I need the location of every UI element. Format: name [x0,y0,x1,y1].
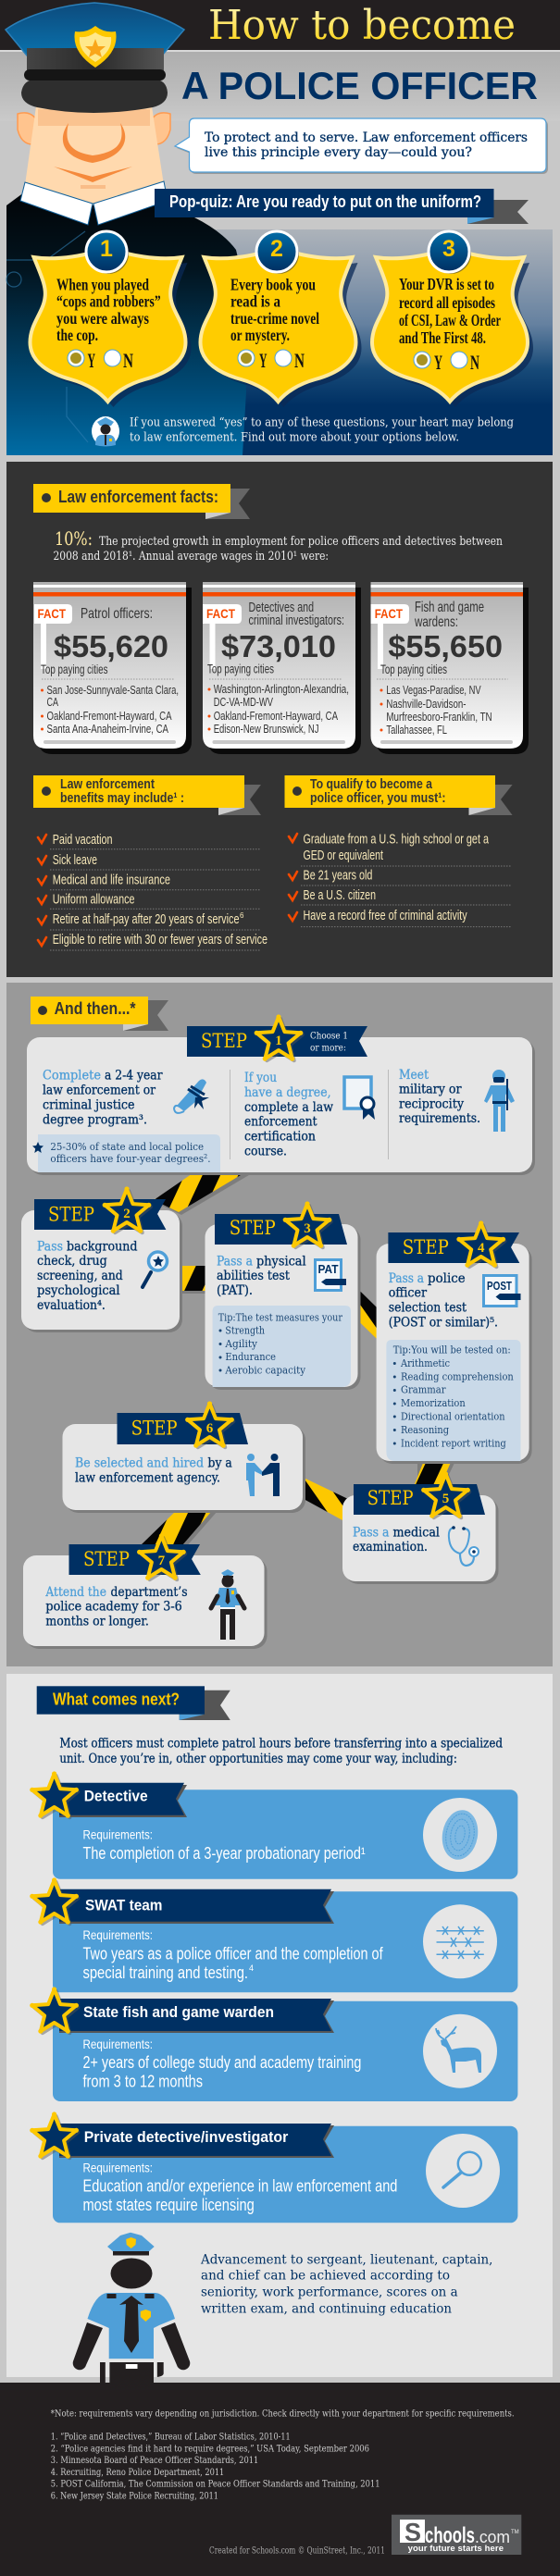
step 1 option: degree program: criminal justice [43,1097,135,1112]
text: projected growth [54,527,504,564]
step 7 card: STEP [83,1548,130,1570]
quiz badge 2: read is a [230,292,280,311]
step 6 card: STEP [131,1418,178,1440]
tip box: PAT [213,1306,351,1387]
icon: magnifier with star [143,1252,167,1287]
illustration: large officer [73,2233,190,2383]
step 1 card [27,1014,535,1175]
fact card: fish and game wardens: Top paying cities [380,662,447,676]
fact card: patrol officers [33,582,192,754]
tip box: POST: Memorization [401,1396,466,1409]
text: projected growth: 2008 and 2018¹. Annual average wages in 2010¹ were: [54,550,329,564]
icon: magnifying glass [443,2152,481,2187]
text: next intro: Most officers must complete patrol hours before transferring into a specialized [59,1736,503,1751]
tip box: POST: Arithmetic [400,1356,450,1369]
career card: detective: The completion of a 3-year probationary period¹ [83,1844,366,1863]
fact card: fish and game wardens: Fish and game [415,600,484,615]
quiz badge 1: Y [87,349,95,372]
icon: POST test sheet: POST [487,1279,512,1293]
step 3 card: Pass a [217,1255,253,1269]
fact card: patrol officers: $55,620 [54,629,168,663]
fact card: fish and game wardens: wardens: [414,614,458,630]
career card: SWAT team [30,1877,517,1992]
step 1 option: certification: enforcement [244,1115,317,1130]
step 1 option: certification: have a degree, [244,1085,331,1100]
step 7 card: police academy for 3-6 [45,1600,182,1615]
icon: certificate [344,1077,375,1120]
text: sources [51,2432,380,2501]
step 1 ribbon [187,1014,367,1061]
tip box: PAT: Tip:The test measures your [218,1310,342,1323]
step 1 option: degree program: degree program³. [43,1112,147,1127]
speech bubble intro: live this principle every day—could you? [205,145,472,160]
panel: and then steps [6,983,553,1666]
step 6 card: Be selected and hired [75,1456,204,1471]
list: qualifications: Graduate from a U.S. high school or get a [304,832,489,848]
step 2 card: STEP [48,1203,94,1225]
step 4 card: selection test [389,1300,467,1315]
heading: qualifications: police officer, you must¹: [310,790,446,806]
icon: diploma [174,1079,209,1113]
text: sources: 1. “Police and Detectives,” Bureau of Labor Statistics, 2010-11 [51,2432,291,2443]
fact card: patrol officers: CA [46,695,58,709]
quiz badge 3: Your DVR is set to [399,275,494,293]
quiz badge 2: 2 [270,236,283,262]
speech bubble intro [175,118,548,174]
step 2 card: psychological [37,1283,120,1298]
quiz badge 3: and The First 48. [399,328,486,347]
step 1 option: certification: certification [244,1130,316,1145]
text: projected growth: 10%: [55,527,93,550]
tip box: POST: Grammar [401,1383,446,1396]
career card: SWAT team: 4 [249,1963,254,1973]
step 5 card: medical [392,1526,440,1541]
step 4 card: STEP [403,1236,449,1258]
panel: law enforcement facts [6,462,553,977]
logo: Schools.com: .com [475,2528,510,2546]
quiz badge 2: or mystery. [230,326,290,344]
step 6 card: 6 [206,1421,214,1436]
text: sources: 6. New Jersey State Police Recruiting, 2011 [51,2490,218,2501]
step 1 ribbon: or more: [310,1043,346,1054]
fact card: fish and game wardens: $55,650 [388,629,503,663]
panel: pop quiz background [6,229,553,455]
step 3 card [205,1201,361,1390]
list: qualifications: Be a U.S. citizen [304,887,376,903]
quiz badge 1: When you played [56,276,149,294]
list: benefits: Retire at half-pay after 20 years of service [53,911,240,927]
fact card: fish and game wardens: FACT [375,606,403,621]
quiz badge 2: true-crime novel [230,309,319,328]
list: benefits: Eligible to retire with 30 or fewer years of service [53,932,268,947]
step 5 card: examination. [353,1540,428,1554]
career card: private detective [30,2112,517,2223]
fact card: fish and game wardens: Tallahassee, FL [386,723,447,737]
step 1 option: certification: If you [244,1071,277,1085]
step 1 option: military: military or [399,1083,462,1097]
tip box: POST: Incident report writing [401,1436,506,1449]
step 6 card: by a [207,1456,232,1471]
quiz badge 2: Every book you [230,276,316,294]
step 1 option: certification [230,1070,375,1159]
icon: handshake [246,1454,280,1496]
tip box: POST [386,1340,520,1461]
text: yes answer conclusion: If you answered “yes” to any of these questions, your heart may belong [130,416,514,430]
step 7 card: months or longer. [45,1615,149,1629]
panel: what comes next [6,1674,553,2377]
banner: pop quiz: Pop-quiz: Are you ready to put on the uniform? [169,192,481,211]
text: next intro: unit. Once you’re in, other opportunities may come your way, including: [59,1752,457,1766]
heading: what comes next [37,1686,230,1720]
heading: and then: And then...* [55,999,136,1018]
fact card: patrol officers: Santa Ana-Anaheim-Irvine, CA [46,722,168,736]
step 2 card: check, drug [37,1254,107,1269]
step 1 option: certification: complete a law [244,1100,333,1115]
step 1 option: degree program: law enforcement or [43,1083,156,1097]
fact card: patrol officers: San Jose-Sunnyvale-Santa Clara, [46,683,179,697]
step 2 card: background [67,1240,138,1255]
step 5 card: Pass a [353,1526,389,1541]
step 7 card: 7 [158,1554,166,1568]
caution tape connectors [141,1170,455,1548]
step 1 option: military: requirements. [399,1111,480,1126]
career card: detective: Requirements: [83,1827,153,1842]
logo: Schools.com: TM [511,2530,519,2535]
quiz badge 3: of CSI, Law & Order [399,311,501,329]
step 7 card [23,1533,267,1649]
fact card: detectives: Edison-New Brunswick, NJ [214,722,318,736]
step 2 card: 2 [123,1207,131,1221]
step 6 card: law enforcement agency. [75,1471,220,1486]
career card: private detective: Private detective/investigator [84,2128,289,2146]
tip box: PAT: Agility [224,1337,257,1350]
list: benefits: 6 [240,911,244,920]
fact card: detectives: Oakland-Fremont-Hayward, CA [214,709,338,723]
title: How to become: How to become [208,2,516,49]
icon: small officer [92,416,119,446]
speech bubble intro: To protect and to serve. Law enforcement officers [205,130,528,145]
career card: state fish and game warden [30,1987,517,2101]
step 1 option: military [388,1068,515,1159]
career card: detective: Detective [84,1788,148,1805]
title: A police officer: A POLICE OFFICER [181,64,538,107]
step 7 card: Attend the [44,1585,106,1600]
heading: qualifications [285,775,513,815]
text: advancement: seniority, work performance, scores on a [201,2285,458,2300]
career card: private detective: Education and/or experience in law enforcement and [83,2176,397,2195]
step 4 card: 4 [478,1241,485,1256]
step 1 option: degree program: a 2-4 year [105,1069,163,1084]
text: advancement: and chief can be achieved according to [201,2268,450,2283]
step 5 card: STEP [367,1487,414,1509]
step 5 card: 5 [442,1492,449,1506]
tip box: POST: Directional orientation [401,1409,505,1422]
quiz badge 1: you were always [56,309,149,328]
step 1 option: certification: course. [244,1145,287,1159]
career card: state fish and game warden: State fish and game warden [83,2003,274,2021]
fact card: patrol officers: Patrol officers: [81,606,153,622]
list: qualifications: Have a record free of criminal activity [304,908,467,923]
fact card: fish and game wardens: Nashville-Davidson- [386,697,467,711]
fact card: detectives: FACT [206,606,235,621]
icon: PAT test sheet [315,1260,346,1290]
step 2 card: evaluation⁴. [37,1298,106,1313]
quiz badge 1: “cops and robbers” [56,292,161,311]
career card: private detective: Requirements: [83,2160,153,2174]
fact card: patrol officers: FACT [37,606,66,621]
text: advancement [200,2253,492,2316]
icon: stethoscope [449,1526,479,1566]
step 1 ribbon: STEP [201,1030,247,1052]
logo: Schools.com: chools [425,2523,475,2548]
quiz badge 3: 3 [442,236,455,262]
step 1 option: degree program: 25-30% of state and local police [50,1140,204,1153]
fact card: fish and game wardens [370,582,529,754]
logo: Schools.com: your future starts here [408,2544,504,2554]
step 4 card: Pass a [389,1271,424,1286]
step 3 card: abilities test [217,1269,291,1283]
list: benefits: Uniform allowance [53,892,135,908]
quiz badge 3: Y [434,351,442,374]
step 3 card: physical [256,1255,306,1269]
list: qualifications: Be 21 years old [304,868,372,884]
fact card: detectives: $73,010 [221,629,336,663]
text: next intro [59,1736,503,1766]
text: sources: 5. POST California, The Commission on Peace Officer Standards and Training, 2011 [51,2479,380,2490]
quiz badge 3: N [470,351,479,374]
icon: soldier [484,1070,515,1132]
list: qualifications: GED or equivalent [304,848,384,863]
icon: fingerprint [439,1807,481,1863]
step 4 card: police [428,1271,466,1286]
tip box: POST: Tip:You will be tested on: [393,1343,511,1356]
quiz badge 1: N [123,349,133,372]
text: yes answer conclusion [130,416,514,445]
heading: law enforcement facts [33,484,250,519]
icon: deer [436,2026,481,2073]
quiz badge 3: record all episodes [399,293,495,312]
career card: SWAT team: Two years as a police officer and the completion of [83,1944,383,1963]
icon: POST test sheet [483,1275,520,1307]
quiz badge 1: 1 [100,236,113,262]
list: benefits: Paid vacation [53,832,113,848]
tip box: POST: Reading comprehension [401,1369,514,1382]
text: sources: 2. “Police agencies find it hard to require degrees,” USA Today, September 2006 [51,2443,369,2454]
step 1 ribbon: Choose 1 [310,1031,348,1042]
career card: state fish and game warden: Requirements: [83,2037,153,2051]
quiz badge 2: N [294,349,305,372]
step 1 option: military: Meet [399,1068,429,1083]
step 5 card [342,1471,498,1584]
step 4 card [377,1220,532,1464]
quiz badge 1 [30,231,191,407]
career card: state fish and game warden: from 3 to 12 months [83,2073,203,2091]
step 1 ribbon: 1 [275,1034,282,1048]
heading: benefits [33,775,261,815]
heading: what comes next: What comes next? [53,1690,180,1708]
step 1 option: military: reciprocity [399,1097,464,1112]
step 3 card: 3 [304,1221,311,1236]
step 1 option: degree program [32,1069,220,1172]
text: sources: 3. Minnesota Board of Peace Officer Standards, 2011 [51,2455,258,2466]
illustration: police officer [6,3,246,455]
career card: SWAT team: special training and testing. [83,1963,248,1982]
fact card: detectives: Top paying cities [207,662,274,676]
step 1 option: degree program: officers have four-year degrees². [50,1152,211,1165]
icon: barbed wire [437,1926,484,1959]
tip box: PAT: Strength [225,1324,265,1337]
quiz badge 2 [200,231,361,407]
fact card: fish and game wardens: Las Vegas-Paradise, NV [386,683,481,697]
heading: and then [31,997,168,1031]
list: qualifications [289,832,511,927]
icon: PAT test sheet: PAT [318,1262,339,1276]
career card: SWAT team: SWAT team [85,1896,163,1913]
logo: Schools.com: S [404,2518,421,2546]
step 4 card: officer [389,1286,428,1301]
quiz badge 1: the cop. [56,326,98,344]
text: advancement: Advancement to sergeant, lieutenant, captain, [200,2253,492,2268]
fact card: fish and game wardens: Murfreesboro-Franklin, TN [386,710,492,724]
heading: benefits: benefits may include¹ : [60,790,184,806]
fact card: patrol officers: Top paying cities [41,662,107,676]
fact card: detectives [203,582,361,754]
step 2 card [21,1186,182,1332]
list: benefits: Sick leave [53,852,97,868]
fact card: detectives: Detectives and [248,600,314,615]
career card: state fish and game warden: 2+ years of college study and academy training [83,2053,361,2072]
tip box: PAT: Aerobic capacity [225,1364,305,1377]
step 3 card: STEP [230,1217,276,1239]
logo: Schools.com [392,2515,521,2555]
heading: qualifications: To qualify to become a [310,776,433,792]
heading: benefits: Law enforcement [60,776,155,792]
step 4 card: (POST or similar)⁵. [389,1315,498,1330]
title band [0,0,560,52]
fact card: patrol officers: Oakland-Fremont-Hayward, CA [46,709,172,723]
step 3 card: (PAT). [217,1283,253,1298]
list: benefits: Medical and life insurance [53,873,170,888]
tip box: POST: Reasoning [401,1423,450,1436]
step 2 card: screening, and [37,1269,123,1283]
step 2 card: Pass [37,1240,63,1255]
career card: detective [30,1771,517,1879]
text: sources: 4. Recruiting, Reno Police Department, 2011 [51,2467,224,2478]
career card: SWAT team: Requirements: [83,1927,153,1942]
step 6 card [63,1401,305,1513]
fact card: detectives: Washington-Arlington-Alexandria, [214,682,349,696]
step 1 option: degree program: Complete [43,1069,101,1084]
career card: private detective: most states require licensing [83,2196,255,2214]
fact card: detectives: DC-VA-MD-WV [214,695,273,709]
list: benefits [38,832,268,950]
footer [0,2383,560,2576]
heading: law enforcement facts: Law enforcement facts: [58,488,218,506]
step 7 card: department’s [111,1585,188,1600]
text: yes answer conclusion: to law enforcement. Find out more about your options below. [130,431,459,445]
quiz badge 2: Y [259,349,268,372]
text: credit: Created for Schools.com © QuinStreet, Inc., 2011 [209,2545,385,2556]
quiz badge 3 [372,231,533,407]
icon: academy officer [211,1569,244,1640]
tip box: PAT: Endurance [225,1350,276,1363]
text: advancement: written exam, and continuing education [201,2301,452,2316]
fact card: detectives: criminal investigators: [248,613,344,628]
banner: pop quiz [155,189,529,224]
